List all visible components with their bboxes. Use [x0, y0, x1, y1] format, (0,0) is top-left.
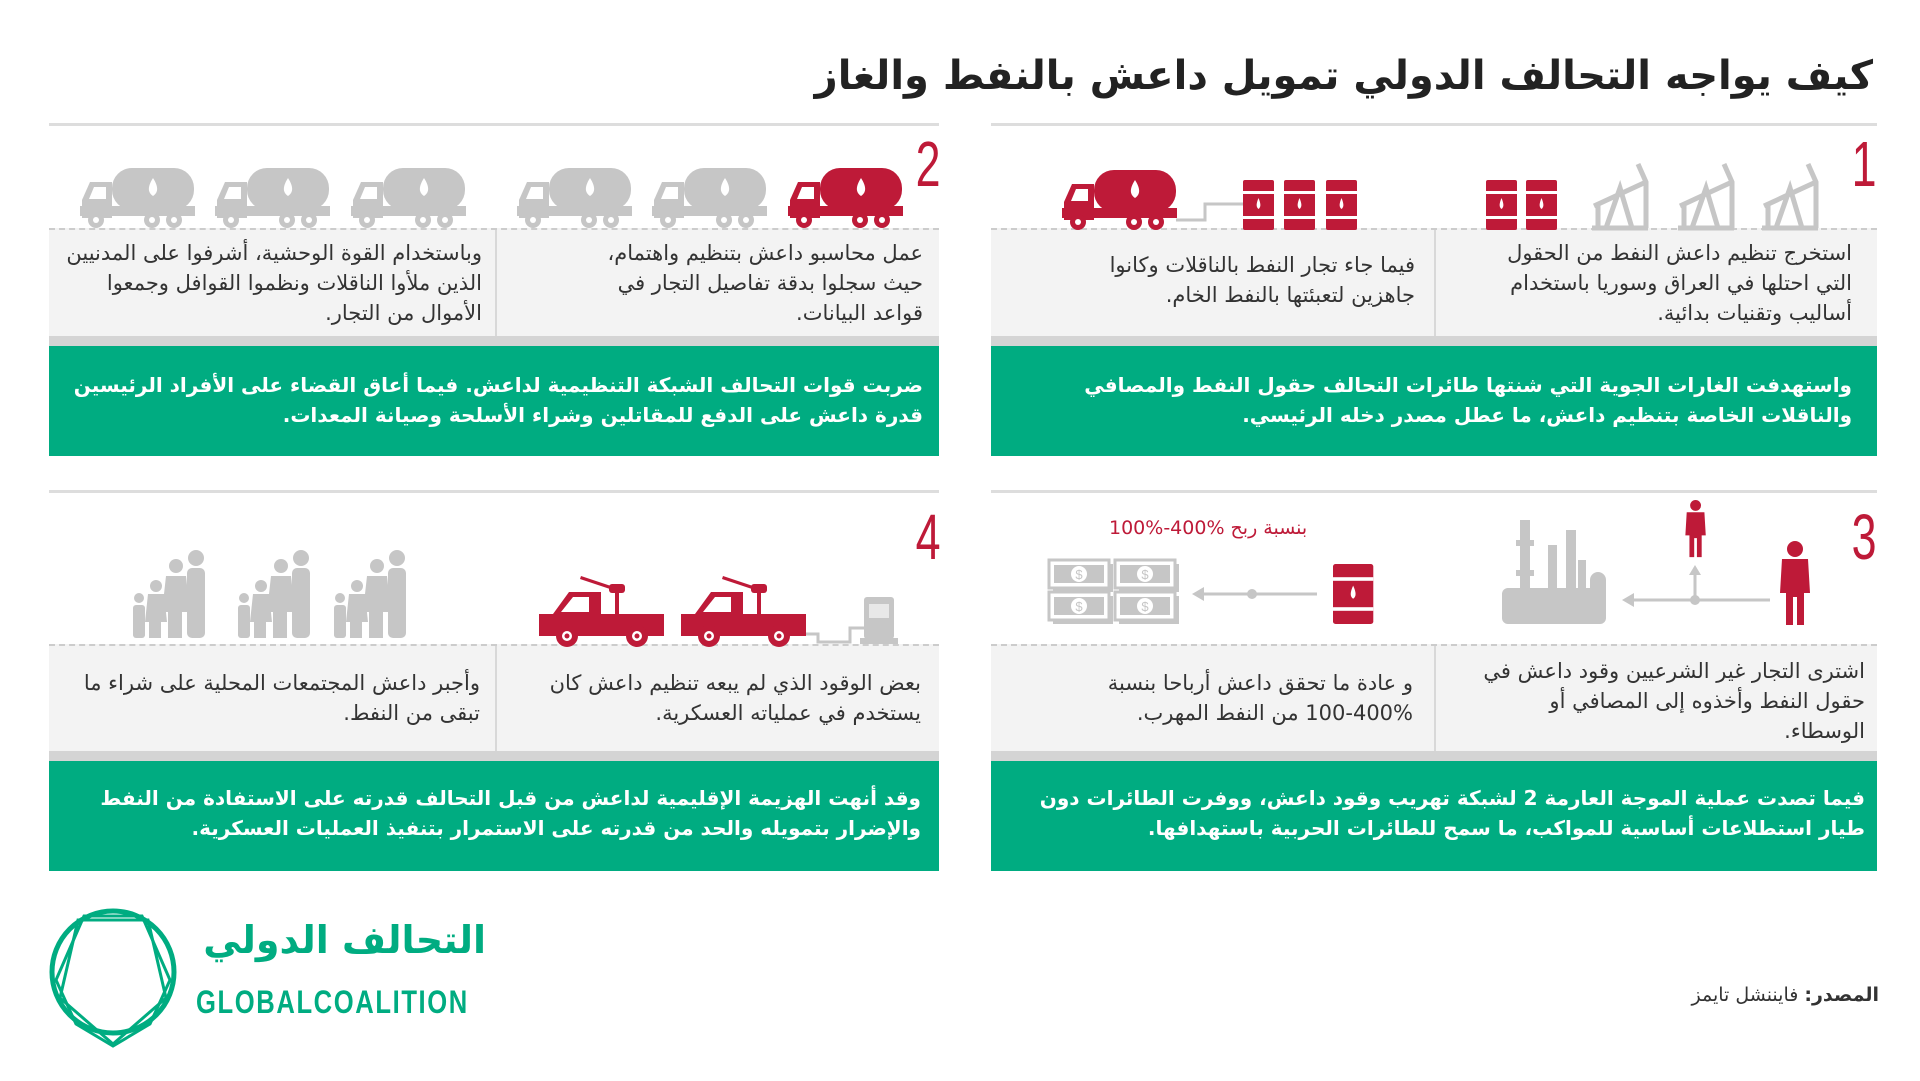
- text: extraction: استخرج تنظيم داعش النفط من الحقول التي احتلها في العراق وسوريا باستخدام أساليب وتقنيات بدائية.: [1507, 241, 1852, 325]
- text: brute force: وباستخدام القوة الوحشية، أشرفوا على المدنيين الذين ملأوا الناقلات ونظموا القوافل وجمعوا الأموال من التجار.: [66, 241, 482, 325]
- panel 3 green summary: فيما تصدت عملية الموجة العارمة 2 لشبكة تهريب وقود داعش، ووفرت الطائرات دون طيار استطلاعات أساسية للمواكب، ما سمح للطائرات الحربية باستهدافها.: [1040, 786, 1865, 840]
- profit label: بنسبة ربح 100%-400%: [1109, 517, 1307, 539]
- icon: traders: [1685, 500, 1810, 625]
- panel 4 number: 4: [916, 501, 941, 573]
- icon: pumpjacks: [1592, 164, 1818, 228]
- logo: [52, 911, 174, 1046]
- text: traders: فيما جاء تجار النفط بالناقلات وكانوا جاهزين لتعبئتها بالنفط الخام.: [1110, 253, 1415, 307]
- panel 3 green summary: [991, 761, 1877, 871]
- text: fuel used: بعض الوقود الذي لم يبعه تنظيم داعش كان يستخدم في عملياته العسكرية.: [550, 671, 921, 725]
- icon: barrels and pipe: [1176, 180, 1357, 230]
- icon: fuel pump: [806, 597, 898, 644]
- panel 1: [991, 128, 1877, 456]
- text: illegal traders: اشترى التجار غير الشرعيين وقود داعش في حقول النفط وأخذوه إلى المصافي أو الوسطاء.: [1483, 659, 1865, 743]
- arrows: [1192, 565, 1770, 607]
- panel 2 green summary: ضربت قوات التحالف الشبكة التنظيمية لداعش. فيما أعاق القضاء على الأفراد الرئيسين قدرة داعش على الدفع للمقاتلين وشراء الأسلحة وصيانة المعدات.: [74, 373, 923, 427]
- text: profits: و عادة ما تحقق داعش أرباحا بنسبة 100-400% من النفط المهرب.: [1108, 671, 1413, 725]
- panel 1 text box: [991, 228, 1877, 336]
- icons: panel 4: [133, 550, 898, 647]
- icon: pickups: [539, 576, 806, 647]
- panel 4: [49, 501, 941, 871]
- icon: barrels: [1486, 180, 1557, 230]
- panel 4 green summary: وقد أنهت الهزيمة الإقليمية لداعش من قبل التحالف قدرته على الاستفادة من النفط والإضرار بتمويله والحد من قدرته على الاستمرار بتنفيذ العمليات العسكرية.: [100, 786, 921, 840]
- text: accountants: عمل محاسبو داعش بتنظيم واهتمام، حيث سجلوا بدقة تفاصيل التجار في قواعد البيانات.: [607, 241, 923, 325]
- panel 3 number: 3: [1852, 501, 1877, 573]
- panel 3: [991, 501, 1877, 871]
- panel 1 green summary: [991, 346, 1877, 456]
- icon: families: [133, 550, 406, 638]
- title: كيف يواجه التحالف الدولي تمويل داعش بالنفط والغاز: [815, 53, 1873, 99]
- icons: panel 2 tankers: [80, 168, 903, 228]
- icon: red barrel: [1333, 564, 1373, 624]
- panel 1 number: 1: [1852, 128, 1877, 200]
- logo text arabic: التحالف الدولي: [203, 918, 486, 962]
- icon: red tanker: [1062, 170, 1177, 230]
- panel 1 green summary: واستهدفت الغارات الجوية التي شنتها طائرات التحالف حقول النفط والمصافي والناقلات الخاصة بتنظيم داعش، ما عطل مصدر دخله الرئيسي.: [1084, 373, 1852, 427]
- icons: panel 3: [1049, 500, 1810, 625]
- icon: refinery: [1502, 520, 1606, 624]
- icon: cash: [1049, 560, 1179, 624]
- panel 2: [49, 128, 941, 456]
- text: communities: وأجبر داعش المجتمعات المحلية على شراء ما تبقى من النفط.: [84, 671, 480, 725]
- panel 4 green summary: [49, 761, 939, 871]
- panel 2 green summary: [49, 346, 939, 456]
- icons: panel 1: [1062, 164, 1818, 230]
- logo text latin: GLOBALCOALITION: [196, 984, 469, 1020]
- panel 2 number: 2: [916, 128, 941, 200]
- source: المصدر: فايننشل تايمز: [1691, 984, 1879, 1006]
